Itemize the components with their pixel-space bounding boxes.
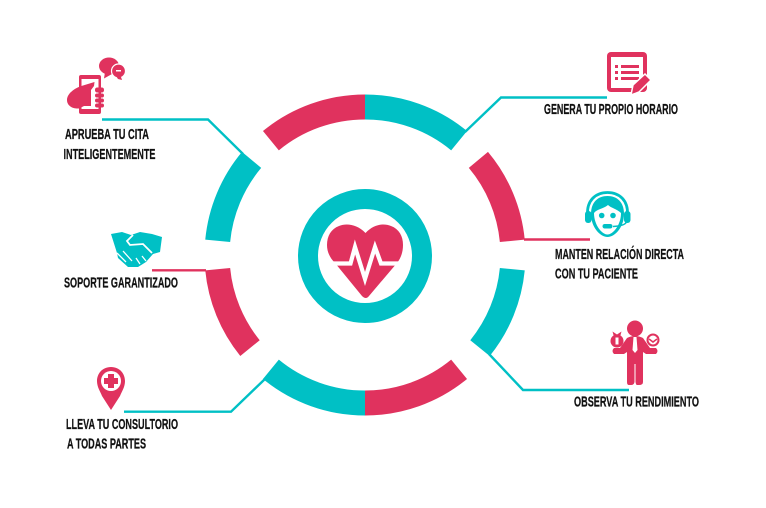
icon: map pin with cross (97, 367, 125, 410)
center heart badge (308, 199, 422, 313)
icon: businessman balancing money and time (610, 320, 658, 385)
icon: phone with chat bubbles (67, 58, 126, 114)
text: genera tu propio horario: GENERA TU PROPIO HORARIO (544, 102, 678, 118)
connector lines (102, 98, 629, 412)
icon: handshake (111, 232, 162, 267)
text: lleva tu consultorio: LLEVA TU CONSULTORIO (66, 417, 178, 433)
text: con tu paciente: CON TU PACIENTE (555, 266, 638, 282)
text: a todas partes: A TODAS PARTES (67, 436, 146, 452)
text: aprueba tu cita: APRUEBA TU CITA (65, 127, 149, 143)
segmented ring (218, 107, 512, 403)
text: soporte garantizado: SOPORTE GARANTIZADO (64, 276, 178, 292)
text: manten relacion directa: MANTEN RELACIÓN DIRECTA (555, 245, 684, 263)
icon: schedule form with pencil (607, 52, 651, 95)
icon: headset agent (585, 192, 630, 237)
text: inteligentemente: INTELIGENTEMENTE (64, 147, 156, 163)
